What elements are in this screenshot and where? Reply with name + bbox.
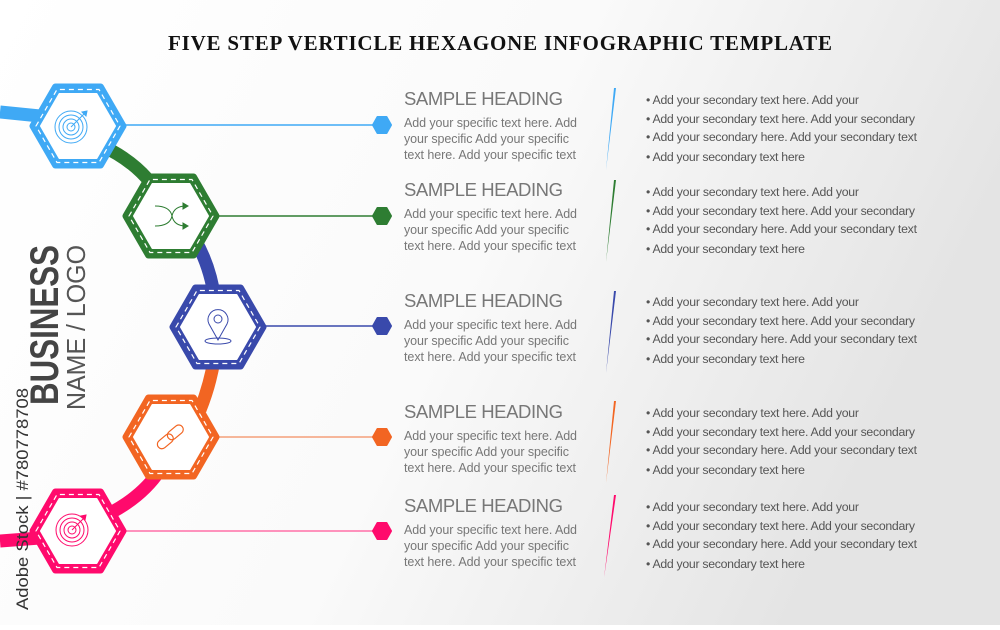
step 3: • Add your secondary text here. Add your secondary <box>646 314 916 328</box>
step 2: • Add your secondary here. Add your secondary text <box>646 222 918 236</box>
step 1: • Add your secondary text here <box>646 150 805 164</box>
step 3: SAMPLE HEADING <box>404 290 563 311</box>
step 4: • Add your secondary text here. Add your <box>646 406 859 420</box>
business name logo <box>23 245 91 410</box>
step 5: • Add your secondary text here <box>646 557 805 571</box>
step 5: your specific Add your specific <box>404 539 569 553</box>
step 5 <box>33 492 918 578</box>
icon: chain link <box>156 423 185 451</box>
step 4: Add your specific text here. Add <box>404 429 577 443</box>
step 4: • Add your secondary here. Add your secondary text <box>646 443 918 457</box>
step 2: Add your specific text here. Add <box>404 207 577 221</box>
step 2: • Add your secondary text here <box>646 242 805 256</box>
step 3: • Add your secondary text here. Add your <box>646 295 859 309</box>
step 4: • Add your secondary text here <box>646 463 805 477</box>
step 2: text here. Add your specific text <box>404 239 577 253</box>
step 2: • Add your secondary text here. Add your <box>646 185 859 199</box>
business name logo: NAME / LOGO <box>61 245 91 410</box>
step 4 <box>126 398 918 483</box>
step 3: your specific Add your specific <box>404 334 569 348</box>
icon: target <box>56 514 88 546</box>
step 1: your specific Add your specific <box>404 132 569 146</box>
step 1: text here. Add your specific text <box>404 148 577 162</box>
step 1: SAMPLE HEADING <box>404 88 563 109</box>
step 5: • Add your secondary text here. Add your secondary <box>646 519 916 533</box>
step 1: Add your specific text here. Add <box>404 116 577 130</box>
step 1: • Add your secondary text here. Add your secondary <box>646 112 916 126</box>
step 5: Add your specific text here. Add <box>404 523 577 537</box>
step 2: SAMPLE HEADING <box>404 179 563 200</box>
title: FIVE STEP VERTICLE HEXAGONE INFOGRAPHIC TEMPLATE <box>168 31 832 55</box>
icon: location pin <box>205 310 231 344</box>
step 2 <box>126 177 918 262</box>
step 3: Add your specific text here. Add <box>404 318 577 332</box>
step 5: • Add your secondary here. Add your secondary text <box>646 537 918 551</box>
step 1 <box>33 87 918 170</box>
step 3 <box>173 288 918 373</box>
step 4: text here. Add your specific text <box>404 461 577 475</box>
step 1: • Add your secondary here. Add your secondary text <box>646 130 918 144</box>
step 4: • Add your secondary text here. Add your secondary <box>646 425 916 439</box>
step 5: SAMPLE HEADING <box>404 495 563 516</box>
step 4: your specific Add your specific <box>404 445 569 459</box>
icon: target <box>55 111 87 143</box>
step 3: text here. Add your specific text <box>404 350 577 364</box>
step 5: text here. Add your specific text <box>404 555 577 569</box>
step 1: • Add your secondary text here. Add your <box>646 93 859 107</box>
watermark id: Adobe Stock | #780778708 <box>13 388 32 610</box>
step 3: • Add your secondary text here <box>646 352 805 366</box>
step 4: SAMPLE HEADING <box>404 401 563 422</box>
step 3: • Add your secondary here. Add your secondary text <box>646 332 918 346</box>
business name logo: BUSINESS <box>23 245 67 405</box>
icon: shuffle <box>155 203 188 229</box>
step 2: your specific Add your specific <box>404 223 569 237</box>
connector path <box>0 112 215 541</box>
step 5: • Add your secondary text here. Add your <box>646 500 859 514</box>
step 2: • Add your secondary text here. Add your secondary <box>646 204 916 218</box>
